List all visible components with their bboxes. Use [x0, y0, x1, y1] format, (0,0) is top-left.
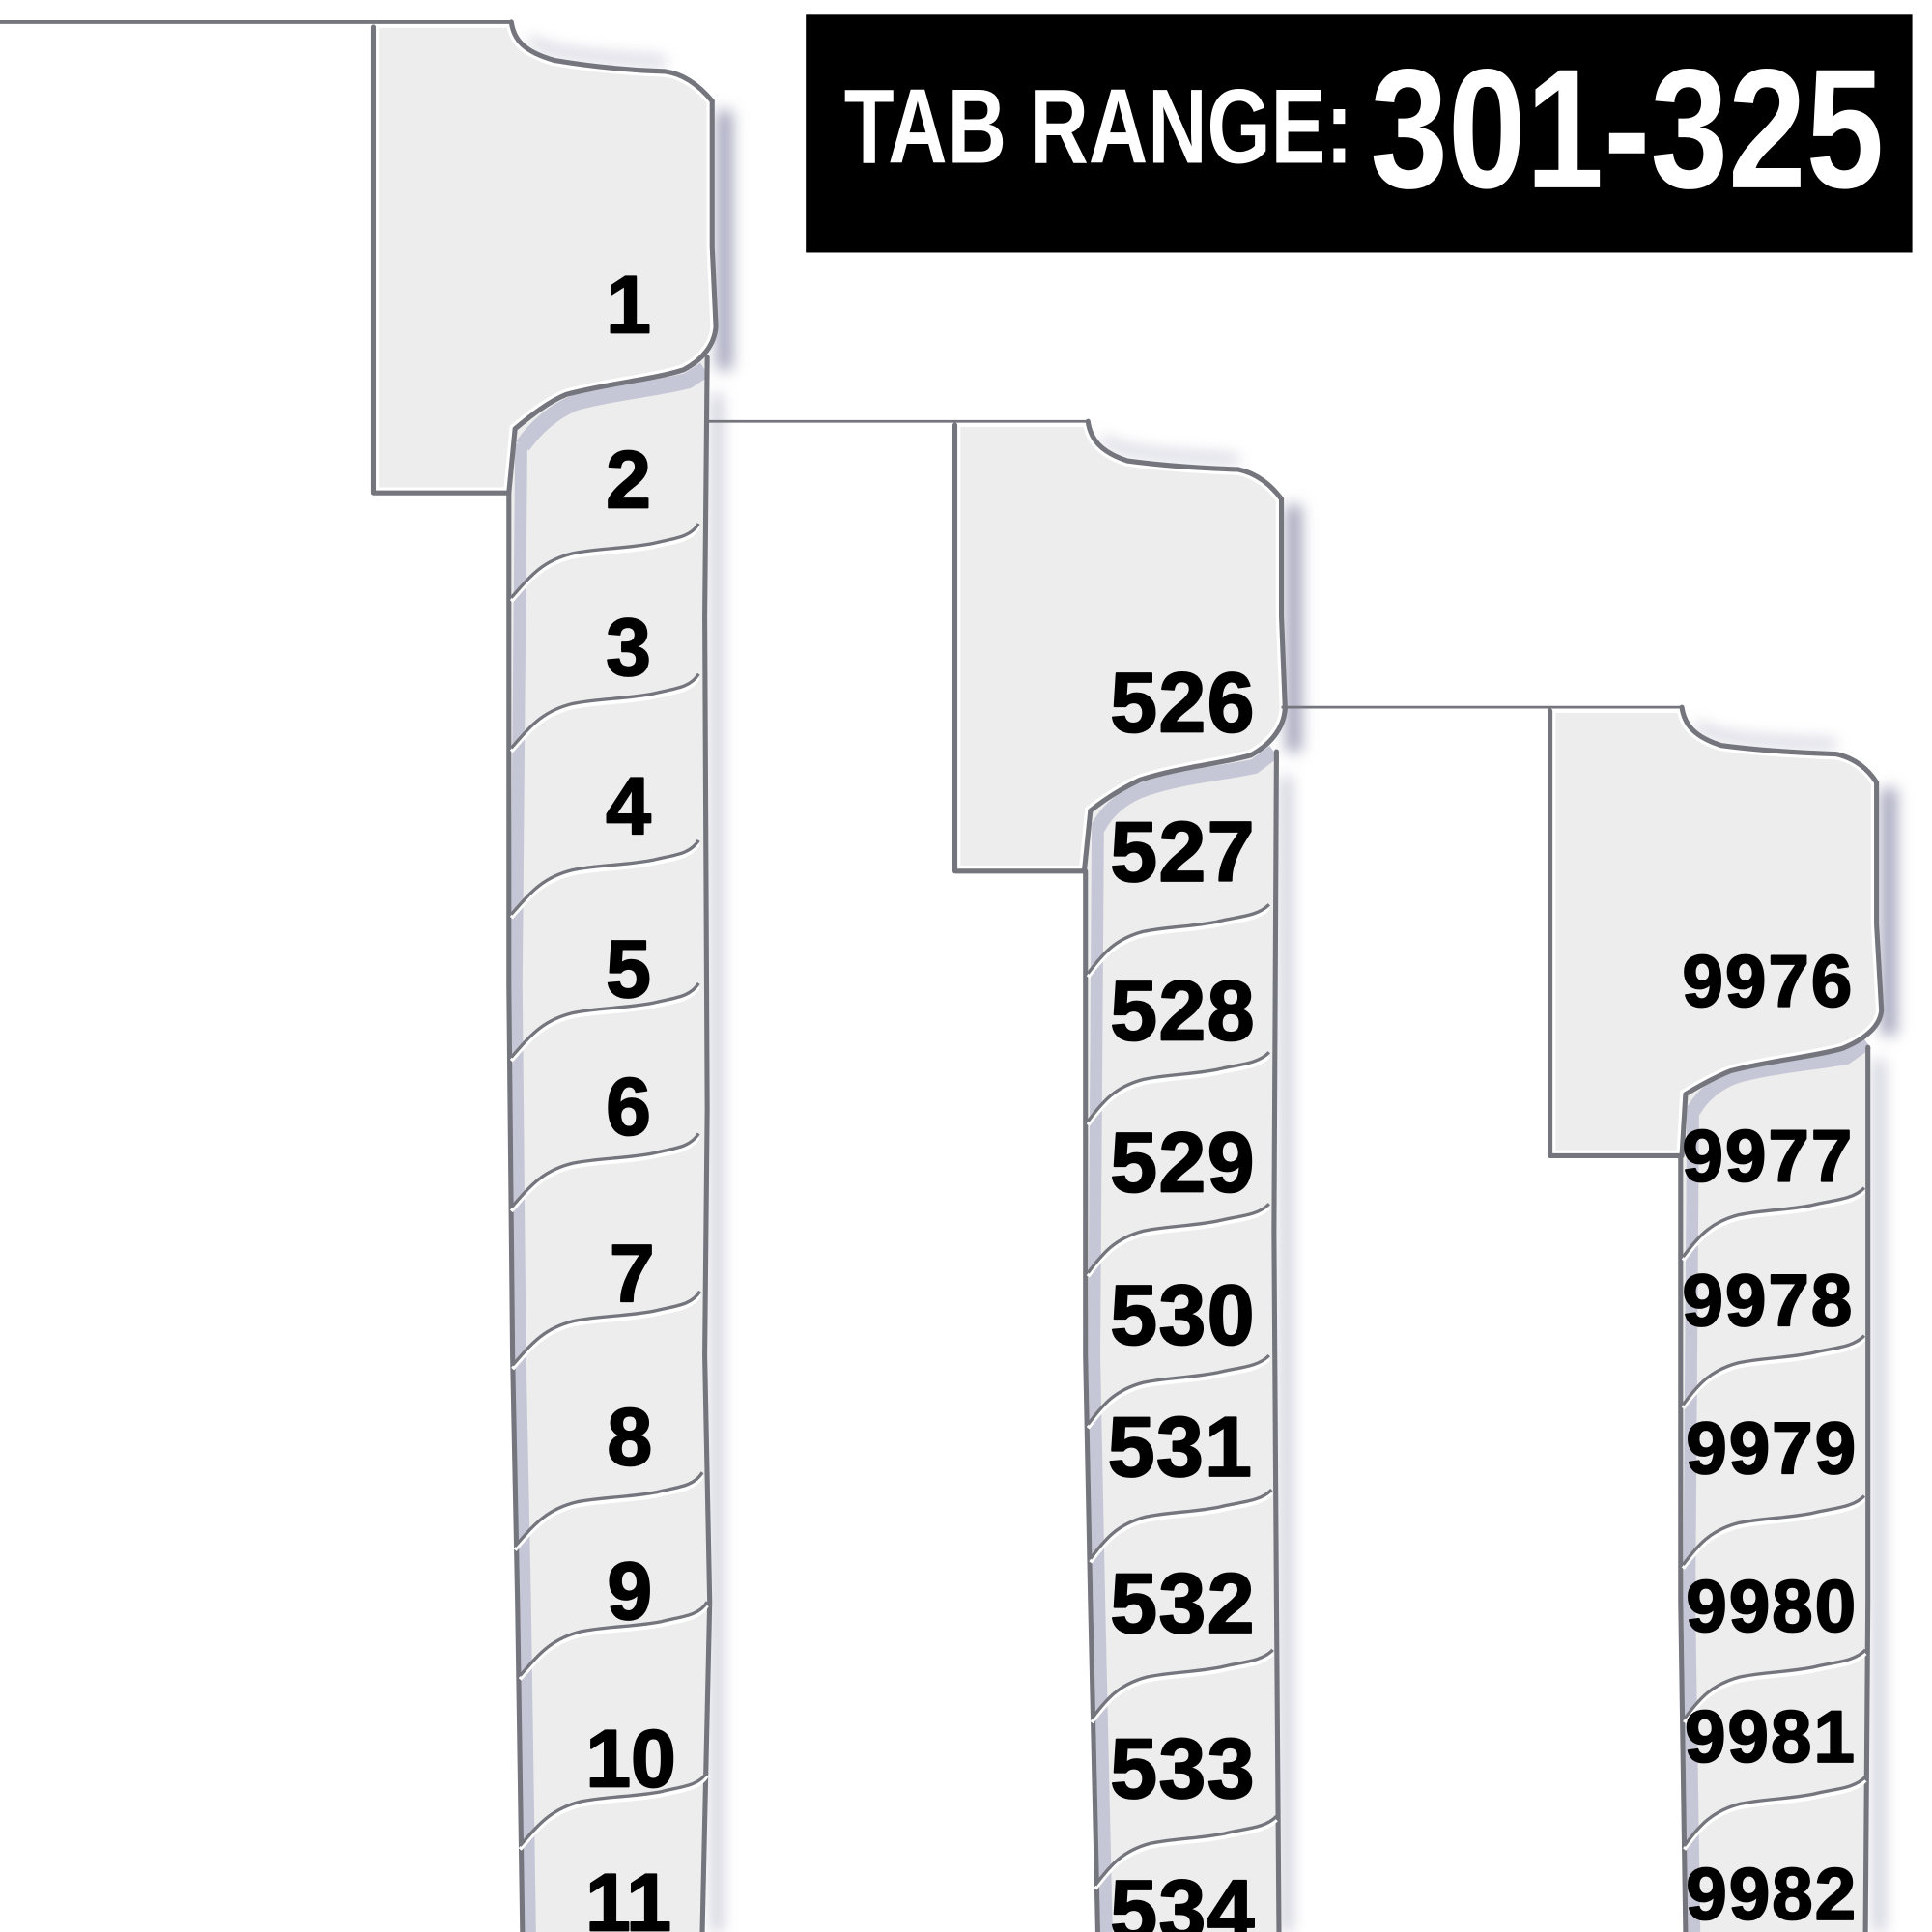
- tab numbers column 2: 530: [1110, 1267, 1256, 1363]
- tab numbers column 1: 6: [606, 1062, 651, 1152]
- index tab 1: [0, 22, 716, 493]
- strip shading column 3: [1690, 1109, 1694, 1932]
- tab numbers column 3: 9981: [1685, 1696, 1857, 1778]
- tab numbers column 1: 8: [607, 1392, 652, 1483]
- under-tab shade column 1: [523, 370, 705, 446]
- tab numbers column 1: 4: [606, 761, 651, 852]
- tab numbers column 1: 10: [585, 1713, 676, 1804]
- column 3: tabs 9976 to 9982: [1282, 707, 1889, 1932]
- under-tab shade column 3: [1693, 1042, 1866, 1112]
- right-side shadow column 3: [1696, 724, 1889, 1932]
- tab numbers column 3: 9979: [1686, 1408, 1858, 1491]
- tab numbers column 3: 9978: [1682, 1260, 1854, 1342]
- title banner: tab range: [806, 14, 1913, 252]
- separators column 1: [511, 524, 707, 1850]
- tab numbers column 2: 531: [1108, 1399, 1253, 1494]
- strip outline column 1: [509, 357, 710, 1932]
- tab numbers column 1: [585, 259, 676, 1932]
- tab numbers column 2: 527: [1110, 804, 1256, 899]
- strip shading column 1: [516, 443, 529, 1932]
- strip of tabs column 3: [1681, 1047, 1868, 1932]
- under-tab shade column 2: [1097, 752, 1274, 828]
- right-side shadow column 1: [529, 40, 724, 1932]
- tab numbers column 1: 3: [606, 602, 651, 693]
- tab numbers column 1: 7: [610, 1228, 655, 1319]
- banner label: TAB RANGE:: [844, 68, 1353, 185]
- tab numbers column 2: 529: [1110, 1114, 1256, 1209]
- separators column 2: [1088, 904, 1276, 1889]
- index tab 9976: [1282, 707, 1882, 1155]
- right-side shadow column 2: [1103, 439, 1293, 1932]
- tab numbers column 2: 528: [1110, 963, 1256, 1059]
- strip of tabs column 1: [509, 357, 710, 1932]
- tab numbers column 1: 1: [606, 259, 651, 350]
- strip outline column 2: [1086, 752, 1279, 1932]
- separators column 3: [1683, 1188, 1865, 1850]
- tab numbers column 2: 526: [1110, 655, 1256, 751]
- tab numbers column 2: 533: [1110, 1720, 1256, 1816]
- strip outline column 3: [1681, 1047, 1868, 1932]
- column 2: tabs 526 to 534: [706, 421, 1293, 1932]
- strip of tabs column 2: [1086, 752, 1279, 1932]
- strip shading column 2: [1094, 826, 1106, 1932]
- tab numbers column 1: 5: [606, 923, 651, 1014]
- tab numbers column 3: 9977: [1682, 1116, 1854, 1198]
- tab numbers column 3: 9980: [1686, 1566, 1858, 1648]
- column 1: tabs 1 to 11: [0, 22, 724, 1932]
- tab numbers column 3: [1682, 941, 1858, 1932]
- tab numbers column 3: 9976: [1682, 941, 1854, 1023]
- tab numbers column 2: [1108, 655, 1256, 1932]
- tab numbers column 2: 532: [1110, 1555, 1256, 1651]
- tab numbers column 1: 2: [606, 435, 651, 526]
- tab numbers column 1: 9: [607, 1546, 652, 1636]
- index tab 526: [706, 421, 1285, 871]
